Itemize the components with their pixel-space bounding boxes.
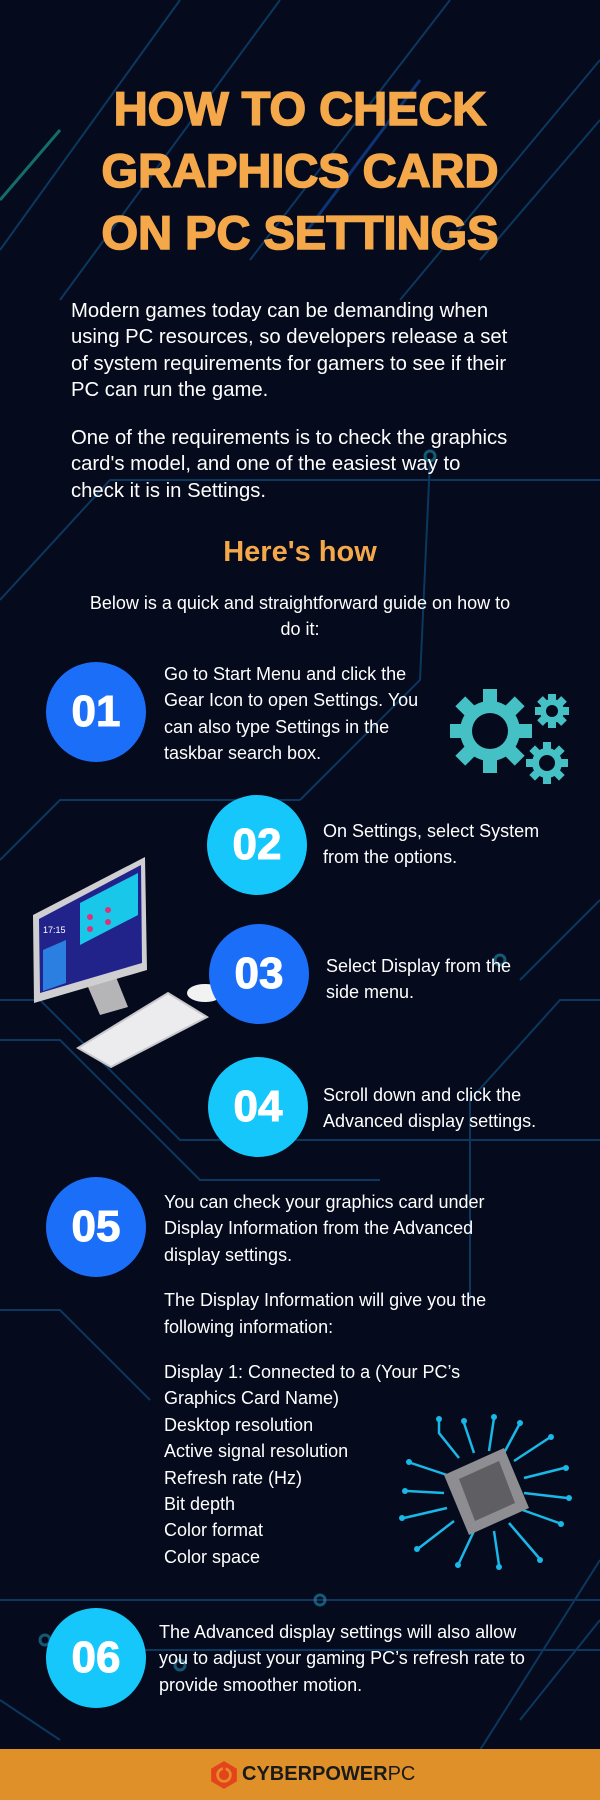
step 05 text: Display Information from the Advanced <box>164 1218 473 1238</box>
intro paragraph 1: using PC resources, so developers release a set <box>71 326 507 348</box>
intro paragraph 1: PC can run the game. <box>71 379 268 401</box>
heading: Here's how: Here's how <box>223 536 377 568</box>
illustration: computer: 17:15 <box>43 925 66 935</box>
step 06 circle <box>46 1608 146 1708</box>
title: ON PC SETTINGS <box>102 206 498 259</box>
step 05 text: display settings. The Display Information will give you the <box>164 1245 486 1310</box>
step 04 circle <box>208 1057 308 1157</box>
step 05 circle <box>46 1177 146 1277</box>
step 06 text <box>159 1622 525 1695</box>
step 06 text: provide smoother motion. <box>159 1675 362 1695</box>
step 05 text: Active signal resolution <box>164 1441 348 1461</box>
step 06 text: The Advanced display settings will also allow <box>159 1622 516 1642</box>
footer <box>0 1749 600 1800</box>
step 04 text: Scroll down and click the <box>323 1085 521 1105</box>
step 01 text: Gear Icon to open Settings. You <box>164 690 418 710</box>
step 03 text <box>326 956 511 1002</box>
intro paragraph 2: check it is in Settings. <box>71 480 266 502</box>
illustration: computer <box>33 857 216 1068</box>
title <box>102 82 498 259</box>
step 02 text <box>323 821 539 867</box>
step 04 circle: 04 <box>234 1082 282 1131</box>
step 01 circle <box>46 662 146 762</box>
step 05 text: Refresh rate (Hz) <box>164 1468 302 1488</box>
intro paragraph 2 <box>71 427 507 502</box>
icon: gears <box>450 689 569 784</box>
title: HOW TO CHECK <box>114 82 486 135</box>
intro paragraph 2: card's model, and one of the easiest way to <box>71 453 460 475</box>
step 03 circle <box>209 924 309 1024</box>
step 02 text: On Settings, select System <box>323 821 539 841</box>
intro paragraph 1: Modern games today can be demanding when <box>71 300 488 322</box>
step 01 text <box>164 664 418 763</box>
step 01 text: taskbar search box. <box>164 743 321 763</box>
intro paragraph 2: One of the requirements is to check the graphics <box>71 427 507 449</box>
step 02 text: from the options. <box>323 847 457 867</box>
logo: CyberPowerPC <box>211 1761 415 1789</box>
step 01 text: Go to Start Menu and click the <box>164 664 406 684</box>
step 03 text: side menu. <box>326 982 414 1002</box>
step 05 text: Graphics Card Name) <box>164 1388 339 1408</box>
step 05 text: Color format <box>164 1520 263 1540</box>
step 05 text <box>164 1192 486 1567</box>
step 04 text: Advanced display settings. <box>323 1111 536 1131</box>
step 05 text: following information: Display 1: Connected to a (Your PC’s <box>164 1317 460 1382</box>
step 05 text: Bit depth <box>164 1494 235 1514</box>
step 02 circle <box>207 795 307 895</box>
step 03 circle: 03 <box>235 949 283 998</box>
step 06 text: you to adjust your gaming PC’s refresh rate to <box>159 1648 525 1668</box>
step 04 text <box>323 1085 536 1131</box>
step 01 text: can also type Settings in the <box>164 717 389 737</box>
step 05 text: Desktop resolution <box>164 1415 313 1435</box>
step 05 text: You can check your graphics card under <box>164 1192 485 1212</box>
title: GRAPHICS CARD <box>102 144 498 197</box>
intro paragraph 1: of system requirements for gamers to see if their <box>71 353 506 375</box>
intro paragraph 1 <box>71 300 508 401</box>
step 05 text: Color space <box>164 1547 260 1567</box>
step 06 circle: 06 <box>72 1633 120 1682</box>
logo: CyberPowerPC: CYBERPOWERPC <box>242 1763 415 1785</box>
step 02 circle: 02 <box>233 820 281 869</box>
step 03 text: Select Display from the <box>326 956 511 976</box>
guide intro: Below is a quick and straightforward guide on how to <box>90 593 510 613</box>
guide intro: do it: <box>280 619 320 639</box>
icon: chip <box>399 1414 572 1570</box>
step 01 circle: 01 <box>72 687 120 736</box>
step 05 circle: 05 <box>72 1202 120 1251</box>
guide intro <box>90 593 510 639</box>
